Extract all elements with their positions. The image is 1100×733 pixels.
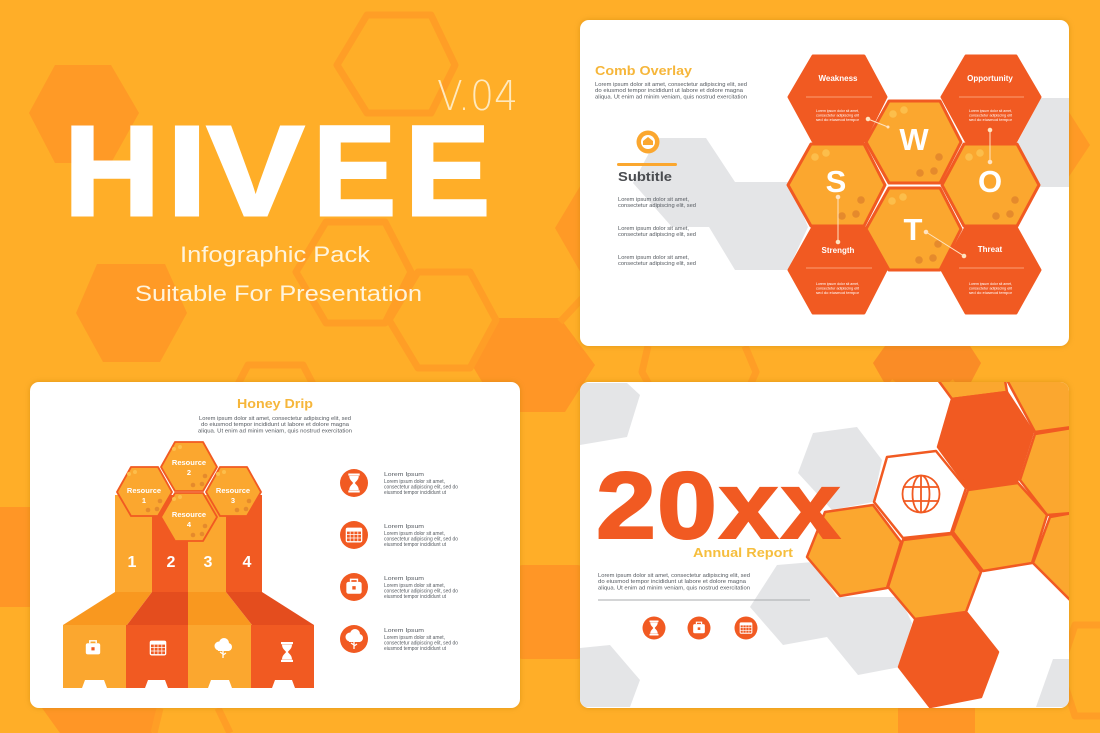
SWOT labels: Strength <box>822 246 855 255</box>
legend: case item: consectetur adipiscing elit, sed do <box>384 588 458 594</box>
SWOT small captions: Lorem ipsum dolor sit amet, <box>969 281 1012 286</box>
SWOT letters: T <box>904 212 923 247</box>
title: HIVEE: E <box>405 100 490 243</box>
legend: hourglass item: Lorem ipsum dolor sit amet, <box>384 479 445 485</box>
legend: case item: Lorem Ipsum <box>384 576 425 582</box>
heading: comb overlay: Comb Overlay <box>595 63 693 78</box>
resource hexagons <box>117 442 261 541</box>
column numbers: 1 <box>128 554 137 571</box>
column numbers: 3 <box>204 554 213 571</box>
subtitle: suitable for presentation: Suitable For Presentation <box>135 281 422 306</box>
panel: honey drip <box>30 382 520 708</box>
report honeycomb <box>807 380 1072 707</box>
SWOT letters: S <box>826 164 846 199</box>
legend: cloud item: Lorem ipsum dolor sit amet, <box>384 635 445 641</box>
report text: Lorem ipsum dolor sit amet, consectetur adipiscing elit, sed <box>598 573 750 579</box>
hexagon dots <box>127 445 251 537</box>
legend: calendar item: Lorem ipsum dolor sit amet, <box>384 531 445 537</box>
subheading: annual report: Annual Report <box>693 545 794 560</box>
SWOT centre hexagons <box>788 101 1039 270</box>
SWOT small captions: Lorem ipsum dolor sit amet, <box>816 108 859 113</box>
sloped column faces <box>63 592 314 625</box>
intro text <box>595 82 747 100</box>
accent line <box>617 163 677 166</box>
SWOT letters <box>826 122 1002 247</box>
big heading: 20xx: x <box>719 453 778 559</box>
title: HIVEE: E <box>313 100 396 243</box>
resource labels: Resource <box>127 486 161 495</box>
big heading: 20xx: x <box>781 453 840 559</box>
SWOT labels: Opportunity <box>967 74 1013 83</box>
legend: case item: eiusmod tempor incididunt ut <box>384 594 446 600</box>
subtitle list: Lorem ipsum dolor sit amet, <box>618 255 689 261</box>
resource labels: Resource <box>172 510 206 519</box>
resource labels <box>127 458 250 529</box>
legend: hourglass item <box>340 469 458 497</box>
columns <box>115 495 262 592</box>
title: HIVEE: V <box>207 100 304 243</box>
report text: do eiusmod tempor incididunt ut labore et dolore magna <box>598 579 747 585</box>
column numbers <box>128 554 252 571</box>
intro text: Lorem ipsum dolor sit amet, consectetur adipiscing elit, sed <box>595 82 747 88</box>
SWOT small captions: sed do eiusmod tempor <box>816 117 860 122</box>
resource labels: 1 <box>142 496 146 505</box>
legend: hourglass item: Lorem Ipsum <box>384 472 425 478</box>
subtitle list: consectetur adipiscing elit, sed <box>618 261 696 267</box>
intro text: Lorem ipsum dolor sit amet, consectetur adipiscing elit, sed <box>199 416 351 422</box>
icon: home badge <box>636 130 660 154</box>
panel: annual report <box>580 380 1072 708</box>
title: HIVEE: H <box>64 100 160 243</box>
legend: cloud item: eiusmod tempor incididunt ut <box>384 646 446 652</box>
legend: calendar item: eiusmod tempor incididunt ut <box>384 542 446 548</box>
subtitle list: Lorem ipsum dolor sit amet, <box>618 226 689 232</box>
SWOT labels: Threat <box>978 245 1003 254</box>
connector lines <box>836 117 992 258</box>
intro text: aliqua. Ut enim ad minim veniam, quis nostrud exercitation <box>198 428 352 434</box>
legend: calendar item: consectetur adipiscing elit, sed do <box>384 536 458 542</box>
gray backdrop hexagons <box>580 383 1069 707</box>
legend: hourglass item: eiusmod tempor incididunt ut <box>384 490 446 496</box>
SWOT letters: O <box>978 164 1002 199</box>
icon row <box>642 616 758 640</box>
honey dots <box>811 106 1019 264</box>
SWOT small captions: consectetur adipiscing elit <box>969 112 1013 118</box>
panel: comb overlay SWOT <box>580 20 1069 346</box>
resource labels: 2 <box>187 468 191 477</box>
intro text: do eiusmod tempor incididunt ut labore et dolore magna <box>201 422 350 428</box>
column numbers: 4 <box>243 554 252 571</box>
subtitle list: Lorem ipsum dolor sit amet, <box>618 197 689 203</box>
report text <box>598 573 750 592</box>
SWOT small captions: consectetur adipiscing elit <box>816 286 860 290</box>
SWOT small captions: Lorem ipsum dolor sit amet, <box>816 281 859 286</box>
SWOT labels: Weakness <box>818 74 858 83</box>
legend: case item <box>340 573 458 601</box>
rule <box>598 600 810 601</box>
subtitle list: consectetur adipiscing elit, sed <box>618 203 696 209</box>
heading: honey drip: Honey Drip <box>237 396 313 411</box>
intro text <box>198 416 352 434</box>
gray backdrop hexagons <box>633 98 1069 270</box>
resource labels: Resource <box>216 486 250 495</box>
big heading: 20xx: 0 <box>657 453 717 559</box>
resource labels: 4 <box>187 520 192 529</box>
outer red hexagons <box>789 56 1040 313</box>
SWOT small captions: sed do eiusmod tempor <box>969 117 1013 122</box>
subtitle list: consectetur adipiscing elit, sed <box>618 232 696 238</box>
SWOT labels <box>806 74 1024 268</box>
subtitle: Subtitle <box>618 169 672 184</box>
legend: cloud item: Lorem Ipsum <box>384 628 425 634</box>
legend: hourglass item: consectetur adipiscing elit, sed do <box>384 484 458 490</box>
subtitle: infographic pack: Infographic Pack <box>180 242 371 267</box>
subtitle list <box>618 197 696 267</box>
SWOT small captions <box>816 108 1013 295</box>
SWOT small captions: Lorem ipsum dolor sit amet, <box>969 108 1012 113</box>
legend: cloud item <box>340 625 458 653</box>
SWOT letters: W <box>899 122 929 157</box>
title: HIVEE: I <box>167 100 207 243</box>
icon: globe <box>902 476 940 512</box>
big heading: 20xx: 2 <box>596 453 656 559</box>
intro text: aliqua. Ut enim ad minim veniam, quis nostrud exercitation <box>595 94 747 100</box>
front blocks <box>63 625 314 688</box>
intro text: do eiusmod tempor incididunt ut labore et dolore magna <box>595 88 744 94</box>
legend: calendar item <box>340 521 458 549</box>
resource labels: Resource <box>172 458 206 467</box>
column numbers: 2 <box>167 554 176 571</box>
resource labels: 3 <box>231 496 235 505</box>
legend: case item: Lorem ipsum dolor sit amet, <box>384 583 445 589</box>
SWOT small captions: consectetur adipiscing elit <box>816 112 860 118</box>
legend: cloud item: consectetur adipiscing elit, sed do <box>384 640 458 646</box>
version label: V.04 <box>437 72 518 120</box>
legend: calendar item: Lorem Ipsum <box>384 524 425 530</box>
SWOT small captions: consectetur adipiscing elit <box>969 286 1013 290</box>
SWOT small captions: sed do eiusmod tempor <box>969 290 1013 295</box>
report text: aliqua. Ut enim ad minim veniam, quis nostrud exercitation <box>598 586 750 592</box>
block icons <box>86 638 293 662</box>
SWOT small captions: sed do eiusmod tempor <box>816 290 860 295</box>
